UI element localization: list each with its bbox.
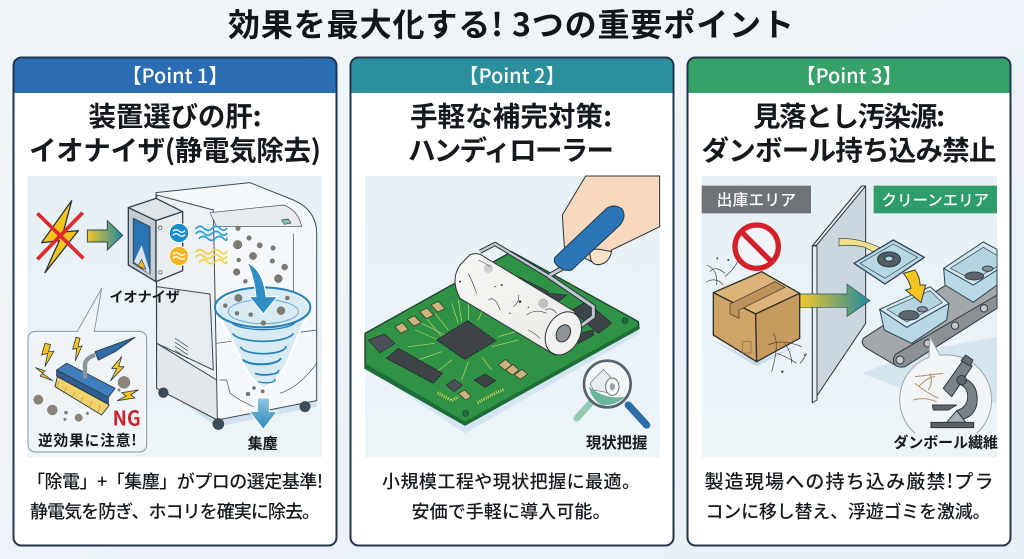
label: 出庫エリア: 出庫エリア	[717, 187, 796, 210]
icon: tray front	[880, 287, 949, 343]
panel 2 header	[350, 57, 674, 93]
panel 3 body text: コンに移し替え、浮遊ゴミを激減。	[706, 498, 990, 524]
panel 1 body text: 静電気を防ぎ、ホコリを確実に除去。	[30, 498, 320, 524]
panel 2 body text	[382, 468, 640, 524]
panel 2 body text: 安価で手軽に導入可能。	[412, 498, 610, 524]
icon: brush	[55, 337, 135, 415]
panel 3 heading: ダンボール持ち込み禁止	[702, 128, 996, 168]
panel 2 heading	[408, 94, 614, 168]
label: 集塵: 集塵	[248, 433, 278, 454]
label: クリーンエリア	[874, 186, 997, 213]
icon: dust collector machine	[156, 183, 317, 429]
title: 効果を最大化する! 3つの重要ポイント	[228, 0, 794, 46]
icon: circuit board	[365, 252, 640, 433]
panel 2 heading: 手軽な補完対策:	[410, 94, 612, 134]
icon: hand	[562, 176, 660, 265]
illustration: ionizer and dust collector	[27, 176, 322, 457]
icon: lint roller	[455, 254, 589, 361]
panel 2 heading: ハンディローラー	[408, 128, 614, 168]
icon: partition wall	[812, 186, 866, 403]
panel 3 header: 【Point 3】	[796, 60, 902, 89]
illustration: cardboard ban	[702, 176, 998, 457]
icon: cardboard box	[713, 272, 800, 362]
dust clumps	[34, 376, 130, 421]
label: ダンボール繊維: ダンボール繊維	[893, 432, 998, 453]
callout: microscope and fibers	[900, 337, 992, 433]
arrow down to tray	[903, 270, 926, 303]
callout: brush warning	[28, 288, 147, 452]
arrow into funnel	[247, 263, 277, 314]
panel 3 body text: 製造現場への持ち込み厳禁!プラ	[704, 467, 994, 494]
icon: crossed lightning	[37, 201, 83, 273]
panel: point 2	[350, 57, 674, 546]
icons: sparks	[36, 337, 138, 401]
panel 2 body text: 小規模工程や現状把握に最適。	[382, 468, 640, 494]
label: 現状把握: 現状把握	[586, 431, 647, 453]
arrow to ionizer	[87, 221, 123, 250]
panel 1 header: 【Point 1】	[122, 60, 228, 89]
panel 3 heading: 見落とし汚染源:	[753, 94, 945, 134]
panel 2 header: 【Point 2】	[459, 60, 565, 89]
illustration: handy roller on PCB	[365, 176, 660, 457]
icon: ion waves	[169, 223, 227, 266]
panel 1 heading	[29, 94, 321, 168]
label: イオナイザ: イオナイザ	[109, 286, 180, 307]
arrow down to collection	[249, 398, 277, 429]
label: クリーンエリア: クリーンエリア	[882, 188, 989, 210]
panel: point 1	[13, 57, 337, 546]
dust particles	[223, 226, 289, 396]
icon: prohibition sign	[735, 225, 778, 268]
icon: conveyor	[862, 262, 997, 367]
label: 出庫エリア	[702, 186, 811, 213]
icon: microscope	[931, 355, 977, 428]
panel 1 body text: 「除電」+「集塵」がプロの選定基準!	[27, 468, 323, 494]
panel 1 heading: イオナイザ(静電気除去)	[29, 128, 321, 168]
icon: ionizer box	[128, 198, 183, 282]
callout: brush warning: 逆効果に注意!	[38, 429, 137, 450]
arrow through wall	[800, 284, 870, 317]
icon: lid with part	[854, 240, 924, 284]
icon: tray back	[944, 242, 997, 302]
icon: cyclone funnel	[215, 287, 311, 388]
panel 1 body text	[27, 468, 323, 524]
panel 3 body text	[704, 467, 994, 524]
callout: brush warning: NG	[113, 402, 141, 431]
panel 3 heading	[702, 94, 996, 168]
panel: point 3	[687, 57, 1011, 546]
icon: magnifier	[577, 361, 647, 425]
panel 1 heading: 装置選びの肝:	[88, 94, 262, 134]
panel 3 header	[687, 57, 1011, 93]
fibers	[707, 258, 807, 372]
curved yellow arrow	[839, 238, 882, 257]
panel 1 header	[13, 57, 337, 93]
icon: roller handle	[480, 206, 624, 335]
